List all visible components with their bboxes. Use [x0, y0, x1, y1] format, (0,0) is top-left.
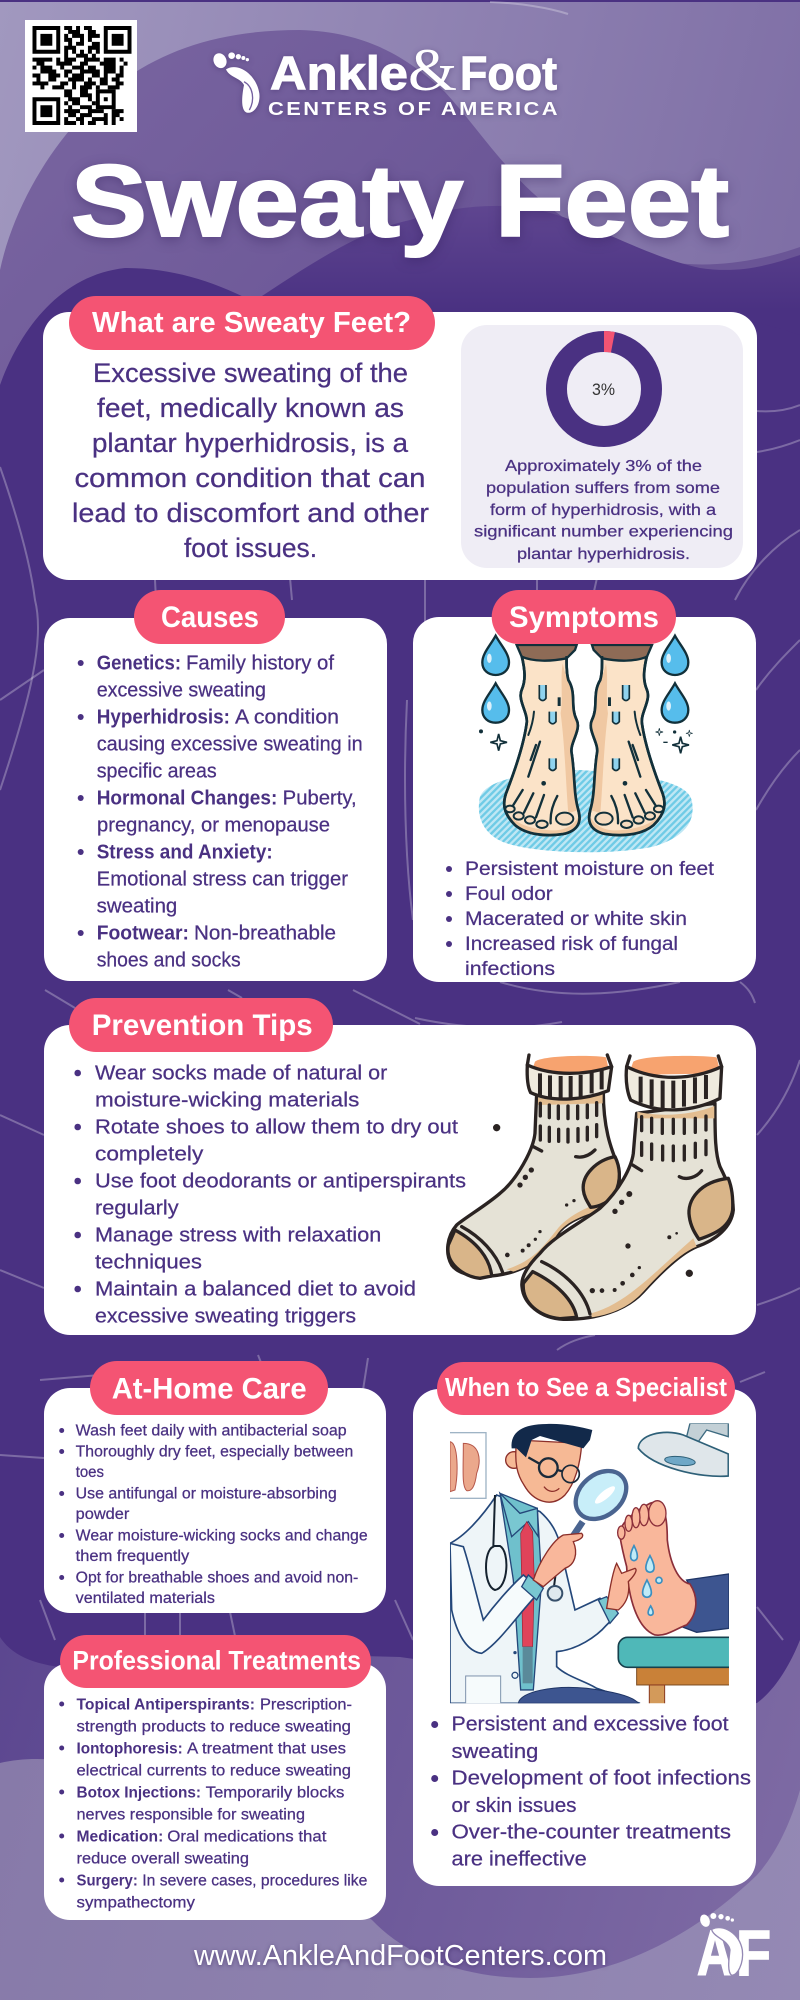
causes list [78, 652, 363, 972]
title: Sweaty Feet [71, 144, 729, 258]
at-home care list: toes [76, 1464, 104, 1481]
right sock [522, 1056, 733, 1319]
causes list: Stress and Anxiety: [97, 842, 273, 864]
stat text: Approximately 3% of the [505, 458, 702, 475]
logo: Ankle & Foot Centers of America [211, 37, 560, 119]
description text [72, 358, 429, 563]
panel: when to see a specialist [413, 1362, 756, 1886]
prevention list: completely [95, 1143, 203, 1165]
heading: what are sweaty feet: What are Sweaty Feet? [92, 307, 411, 339]
causes list: A condition [235, 706, 339, 728]
symptoms list [446, 859, 715, 980]
stethoscope [486, 1495, 562, 1601]
symptoms list: Persistent moisture on feet [465, 859, 715, 880]
treatments list: Iontophoresis: [76, 1740, 183, 1757]
description text: common condition that can [74, 463, 426, 493]
stat text [474, 458, 733, 563]
heading: symptoms [492, 590, 676, 644]
QR code [25, 20, 137, 132]
treatments list: electrical currents to reduce sweating [76, 1762, 351, 1779]
treatments list: Temporarily blocks [206, 1784, 345, 1801]
at-home care list: Use antifungal or moisture-absorbing [76, 1485, 337, 1502]
prevention list: excessive sweating triggers [95, 1305, 356, 1327]
treatments list: nerves responsible for sweating [76, 1806, 305, 1823]
causes list: causing excessive sweating in [97, 734, 363, 756]
at-home care list: them frequently [76, 1548, 190, 1565]
prevention list [74, 1062, 466, 1327]
specialist list: are ineffective [452, 1849, 587, 1871]
stat box [461, 325, 743, 568]
causes list: sweating [97, 896, 177, 918]
causes list: specific areas [97, 760, 217, 782]
causes list: Hyperhidrosis: [97, 706, 230, 728]
magnifying glass [570, 1468, 628, 1534]
specialist list: Over-the-counter treatments [452, 1822, 731, 1844]
prevention list: Manage stress with relaxation [95, 1224, 381, 1246]
doctor coat [450, 1493, 640, 1706]
illustration: doctor examining foot [443, 1423, 738, 1706]
causes list: Hormonal Changes: [97, 788, 277, 810]
specialist list: Development of foot infections [452, 1768, 751, 1790]
panel: prevention tips [44, 998, 756, 1335]
donut chart: 3% [556, 342, 652, 436]
treatments list: Prescription- [260, 1696, 352, 1713]
causes list: excessive sweating [97, 680, 266, 702]
exam lamp [638, 1423, 728, 1476]
at-home care list: Opt for breathable shoes and avoid non- [76, 1569, 358, 1586]
prevention list: techniques [95, 1251, 202, 1273]
specialist list: or skin issues [452, 1795, 576, 1817]
prevention list: Wear socks made of natural or [95, 1062, 388, 1084]
heading: causes [134, 590, 285, 644]
panel: what are sweaty feet [43, 296, 757, 580]
heading: prevention tips: Prevention Tips [92, 1009, 313, 1042]
left sock [448, 1055, 619, 1278]
causes list: Emotional stress can trigger [97, 868, 348, 890]
description text: lead to discomfort and other [72, 498, 429, 528]
causes list: Puberty, [283, 788, 357, 810]
causes list: shoes and socks [97, 950, 241, 972]
specialist list: sweating [452, 1741, 538, 1763]
prevention list: Rotate shoes to allow them to dry out [95, 1116, 458, 1138]
heading: prevention tips [69, 998, 333, 1052]
heading: when to see a specialist [437, 1362, 735, 1415]
treatments list: reduce overall sweating [76, 1850, 249, 1867]
doctor head [506, 1424, 592, 1502]
at-home care list: ventilated materials [76, 1590, 215, 1607]
treatments list: sympathectomy [76, 1894, 195, 1911]
causes list: Family history of [186, 652, 334, 674]
stat text: form of hyperhidrosis, with a [490, 502, 716, 519]
causes list: Non-breathable [194, 922, 336, 944]
illustration: socks [448, 1055, 733, 1319]
prevention list: Maintain a balanced diet to avoid [95, 1278, 416, 1300]
donut chart: 3%: 3% [592, 380, 615, 399]
description text: foot issues. [184, 533, 317, 563]
causes list: Genetics: [97, 652, 181, 674]
footer AF logo: A [697, 1917, 733, 1989]
prevention list: Use foot deodorants or antiperspirants [95, 1170, 466, 1192]
wall chart [450, 1432, 487, 1499]
heading: symptoms: Symptoms [509, 601, 659, 634]
logo: Ankle & Foot Centers of America: Foot [460, 46, 557, 100]
treatments list: Topical Antiperspirants: [76, 1696, 255, 1713]
heading: professional treatments [60, 1635, 371, 1688]
at-home care list [59, 1422, 368, 1607]
causes list: pregnancy, or menopause [97, 814, 330, 836]
treatments list: strength products to reduce sweating [76, 1718, 351, 1735]
symptoms list: Macerated or white skin [465, 909, 687, 930]
footer AF logo [697, 1913, 771, 1989]
symptoms list: Foul odor [465, 884, 553, 905]
heading: professional treatments: Professional Treatments [72, 1645, 361, 1675]
symptoms list: Increased risk of fungal [465, 934, 678, 955]
description text: feet, medically known as [97, 393, 404, 423]
at-home care list: Wash feet daily with antibacterial soap [76, 1422, 347, 1439]
heading: at-home care: At-Home Care [112, 1372, 307, 1405]
at-home care list: Wear moisture-wicking socks and change [76, 1527, 368, 1544]
footer website: www.AnkleAndFootCenters.com [193, 1940, 607, 1972]
symptoms list: infections [465, 959, 555, 980]
treatments list: In severe cases, procedures like [142, 1872, 367, 1889]
stat text: plantar hyperhidrosis. [517, 546, 690, 563]
logo: Ankle & Foot Centers of America: & [408, 37, 457, 103]
footer AF logo: F [736, 1917, 771, 1989]
treatments list [59, 1696, 367, 1911]
exam table [618, 1637, 738, 1705]
doctor hand [533, 1533, 583, 1587]
illustration: sweaty feet [479, 636, 693, 852]
heading: at-home care [90, 1361, 328, 1415]
treatments list: A treatment that uses [187, 1740, 346, 1757]
panel: professional treatments [44, 1635, 386, 1920]
treatments list: Botox Injections: [76, 1784, 201, 1801]
panel: symptoms [413, 590, 756, 982]
logo: Ankle & Foot Centers of America: Ankle [270, 46, 408, 100]
logo: Ankle & Foot Centers of America: CENTERS OF AMERICA [268, 99, 560, 119]
prevention list: regularly [95, 1197, 179, 1219]
description text: Excessive sweating of the [93, 358, 408, 388]
treatments list: Surgery: [76, 1872, 138, 1889]
treatments list: Oral medications that [167, 1828, 327, 1845]
specialist list [431, 1714, 751, 1871]
patient foot [607, 1501, 729, 1635]
panel: causes [44, 590, 387, 981]
specialist list: Persistent and excessive foot [452, 1714, 729, 1736]
stat text: population suffers from some [486, 480, 720, 497]
icon: footprint [211, 51, 259, 113]
prevention list: moisture-wicking materials [95, 1089, 359, 1111]
treatments list: Medication: [76, 1828, 163, 1845]
heading: causes: Causes [161, 601, 259, 634]
stat text: significant number experiencing [474, 524, 733, 540]
description text: plantar hyperhidrosis, is a [92, 428, 408, 458]
causes list: Footwear: [97, 922, 189, 944]
panel: at-home care [44, 1361, 386, 1613]
heading: when to see a specialist: When to See a Specialist [445, 1372, 727, 1402]
heading: what are sweaty feet [69, 296, 435, 350]
at-home care list: Thoroughly dry feet, especially between [76, 1443, 353, 1460]
at-home care list: powder [76, 1506, 129, 1523]
